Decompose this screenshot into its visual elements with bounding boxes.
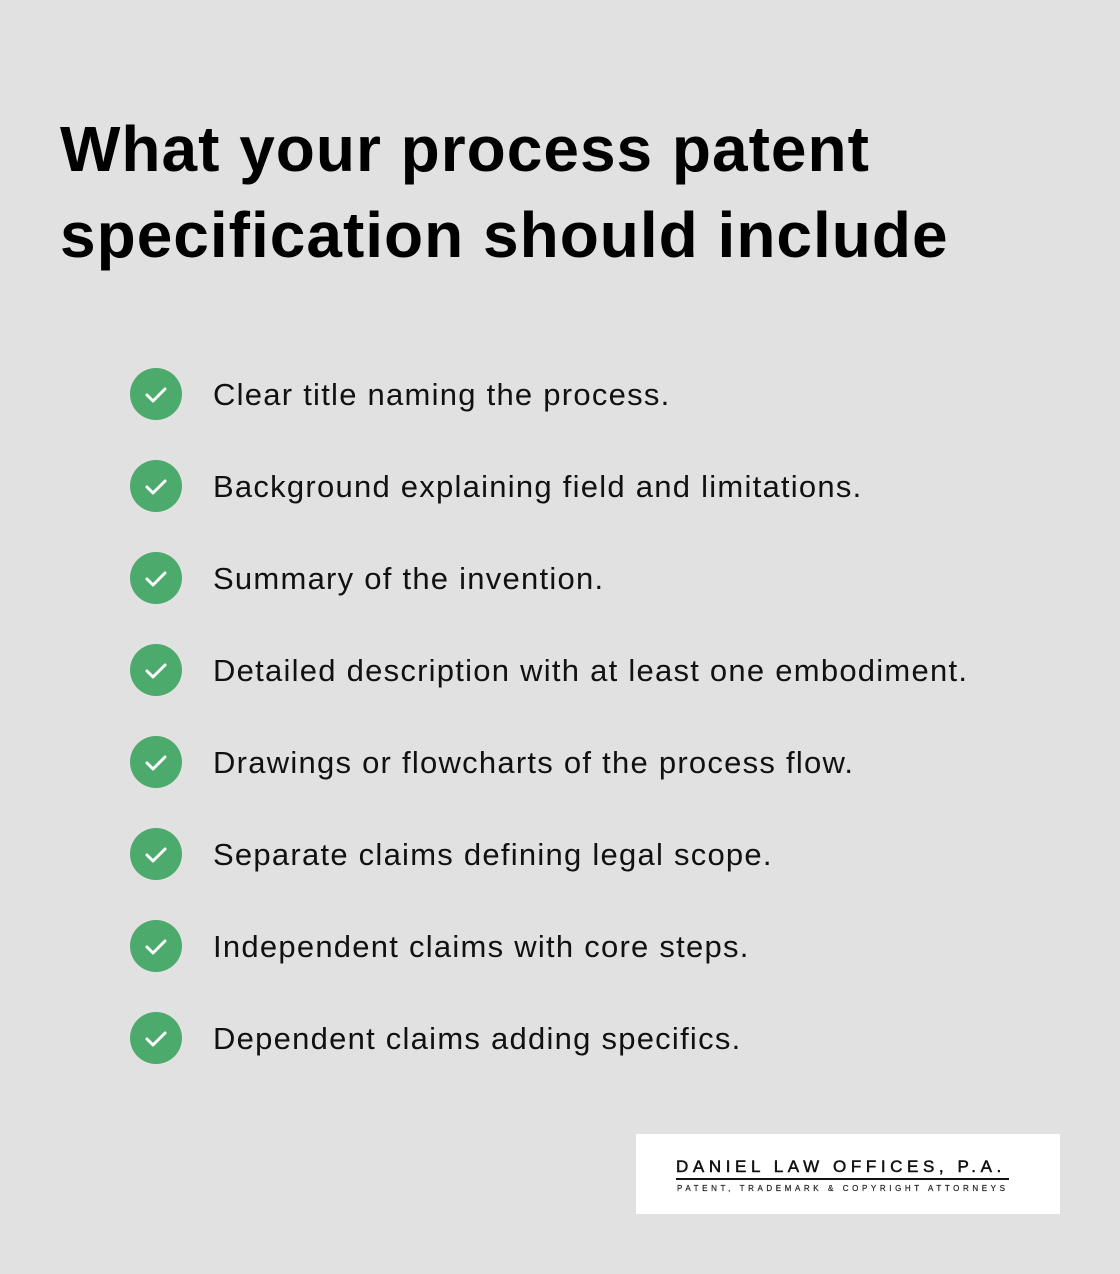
item 1 xyxy=(130,368,670,420)
item 4: Detailed description with at least one embodiment. xyxy=(213,653,968,688)
item 7: Independent claims with core steps. xyxy=(213,929,750,964)
title: What your process patent xyxy=(60,113,870,185)
logo: DANIEL LAW OFFICES, P.A. xyxy=(676,1157,1006,1176)
title: specification should include xyxy=(60,199,949,271)
item 5: Drawings or flowcharts of the process flow. xyxy=(213,745,854,780)
item 8: Dependent claims adding specifics. xyxy=(213,1021,741,1056)
logo: PATENT, TRADEMARK & COPYRIGHT ATTORNEYS xyxy=(677,1184,1009,1193)
item 3 xyxy=(130,552,604,604)
item 6: Separate claims defining legal scope. xyxy=(213,837,773,872)
item 4 xyxy=(130,644,968,696)
item 5 xyxy=(130,736,854,788)
item 7 xyxy=(130,920,750,972)
item 2 xyxy=(130,460,863,512)
title xyxy=(60,113,949,271)
item 8 xyxy=(130,1012,741,1064)
item 6 xyxy=(130,828,773,880)
item 2: Background explaining field and limitations. xyxy=(213,469,863,504)
item 3: Summary of the invention. xyxy=(213,561,604,596)
item 1: Clear title naming the process. xyxy=(213,377,670,412)
logo xyxy=(636,1134,1060,1214)
